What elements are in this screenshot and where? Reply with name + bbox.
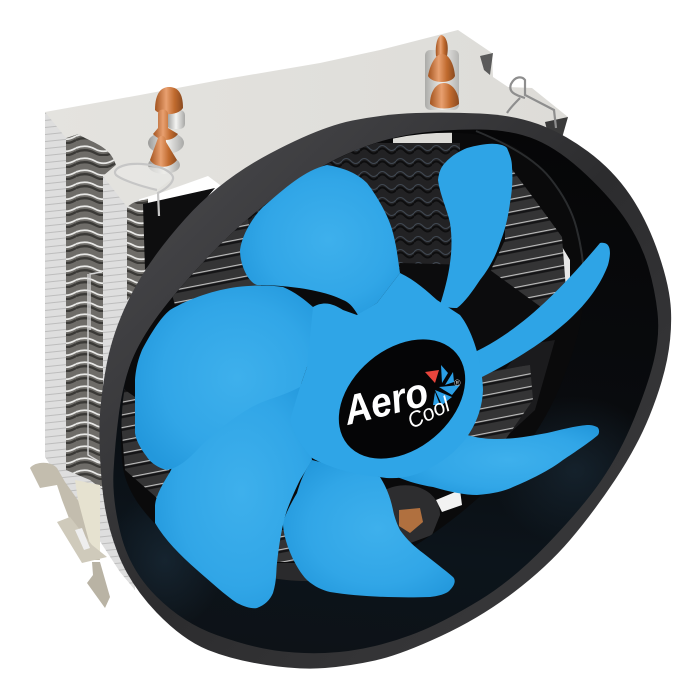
fan duct inner flare	[100, 120, 670, 660]
mounting clip	[30, 463, 110, 608]
logo icon: red triangle	[425, 370, 439, 383]
heatsink wavy fin column	[66, 134, 116, 490]
left heatpipes	[148, 87, 185, 174]
blade bottom left	[155, 375, 312, 608]
blade bottom	[283, 460, 455, 597]
logo icon: blue petals	[433, 365, 460, 405]
clip arm	[30, 463, 100, 560]
copper base	[399, 508, 423, 533]
throat background	[122, 204, 550, 563]
heatpipe collar	[148, 132, 184, 154]
copper pipe tip	[155, 87, 183, 114]
dark wavy fins behind blades	[200, 143, 460, 268]
heatsink side wire	[88, 272, 102, 462]
blade right curved	[456, 243, 610, 378]
fan blades	[135, 144, 610, 608]
copper pipe tip	[436, 35, 448, 59]
heatsink front fin panel	[103, 176, 127, 345]
heatpipe collar	[167, 110, 185, 129]
white gap lower	[436, 490, 462, 512]
fan throat	[122, 132, 570, 581]
fan frame dark right	[506, 340, 555, 432]
registered mark: ®	[454, 378, 461, 388]
flare base	[100, 120, 670, 660]
fan hub	[290, 273, 483, 478]
copper pipe	[153, 110, 178, 140]
left wire clip	[115, 164, 173, 216]
logo black ellipse	[315, 315, 489, 483]
heatpipe collar	[425, 50, 459, 110]
fan motor frame upper	[400, 263, 540, 306]
striped fins between blades	[468, 365, 533, 439]
heatsink	[45, 30, 568, 590]
right heatpipes	[425, 35, 459, 110]
fan arc	[385, 485, 440, 545]
blade top left	[240, 165, 400, 315]
logo word Cool: Cool	[403, 391, 455, 433]
lower fan frame band	[410, 480, 520, 565]
heatsink inner fin edge	[127, 198, 148, 300]
copper pipe tip	[430, 83, 459, 108]
flare blue haze left	[128, 521, 200, 604]
hub logo	[315, 315, 489, 483]
copper pipe	[428, 54, 455, 82]
top right fin notch	[480, 53, 493, 75]
striped fins upper left	[172, 219, 261, 305]
black corner triangle	[143, 188, 215, 270]
heatsink left side fins	[45, 112, 140, 590]
blade left large	[135, 286, 320, 470]
clip tab	[87, 562, 110, 608]
logo word Aero: Aero	[338, 369, 433, 434]
wire loop funnel	[115, 164, 173, 190]
clip plate	[75, 480, 100, 555]
striped fins right	[490, 160, 566, 310]
lower frame band left	[276, 563, 308, 581]
blade right lower	[397, 425, 599, 495]
blade top slim	[438, 144, 512, 308]
fan duct outer ring	[99, 113, 671, 669]
wire	[115, 164, 173, 216]
bright fin edge at top	[393, 132, 452, 143]
striped fins bottom	[277, 530, 294, 562]
flare blue haze right	[522, 418, 623, 518]
heatsink top face	[45, 30, 568, 207]
heatpipe collar	[148, 156, 180, 174]
striped fins left	[122, 390, 170, 498]
clip slot	[75, 528, 90, 550]
top right fin corner	[545, 117, 568, 142]
copper pipe	[150, 136, 177, 167]
white sliver right	[562, 248, 570, 282]
clip bracket	[57, 517, 107, 563]
flare inner rim arc	[476, 131, 584, 276]
right wire clip	[507, 77, 556, 128]
